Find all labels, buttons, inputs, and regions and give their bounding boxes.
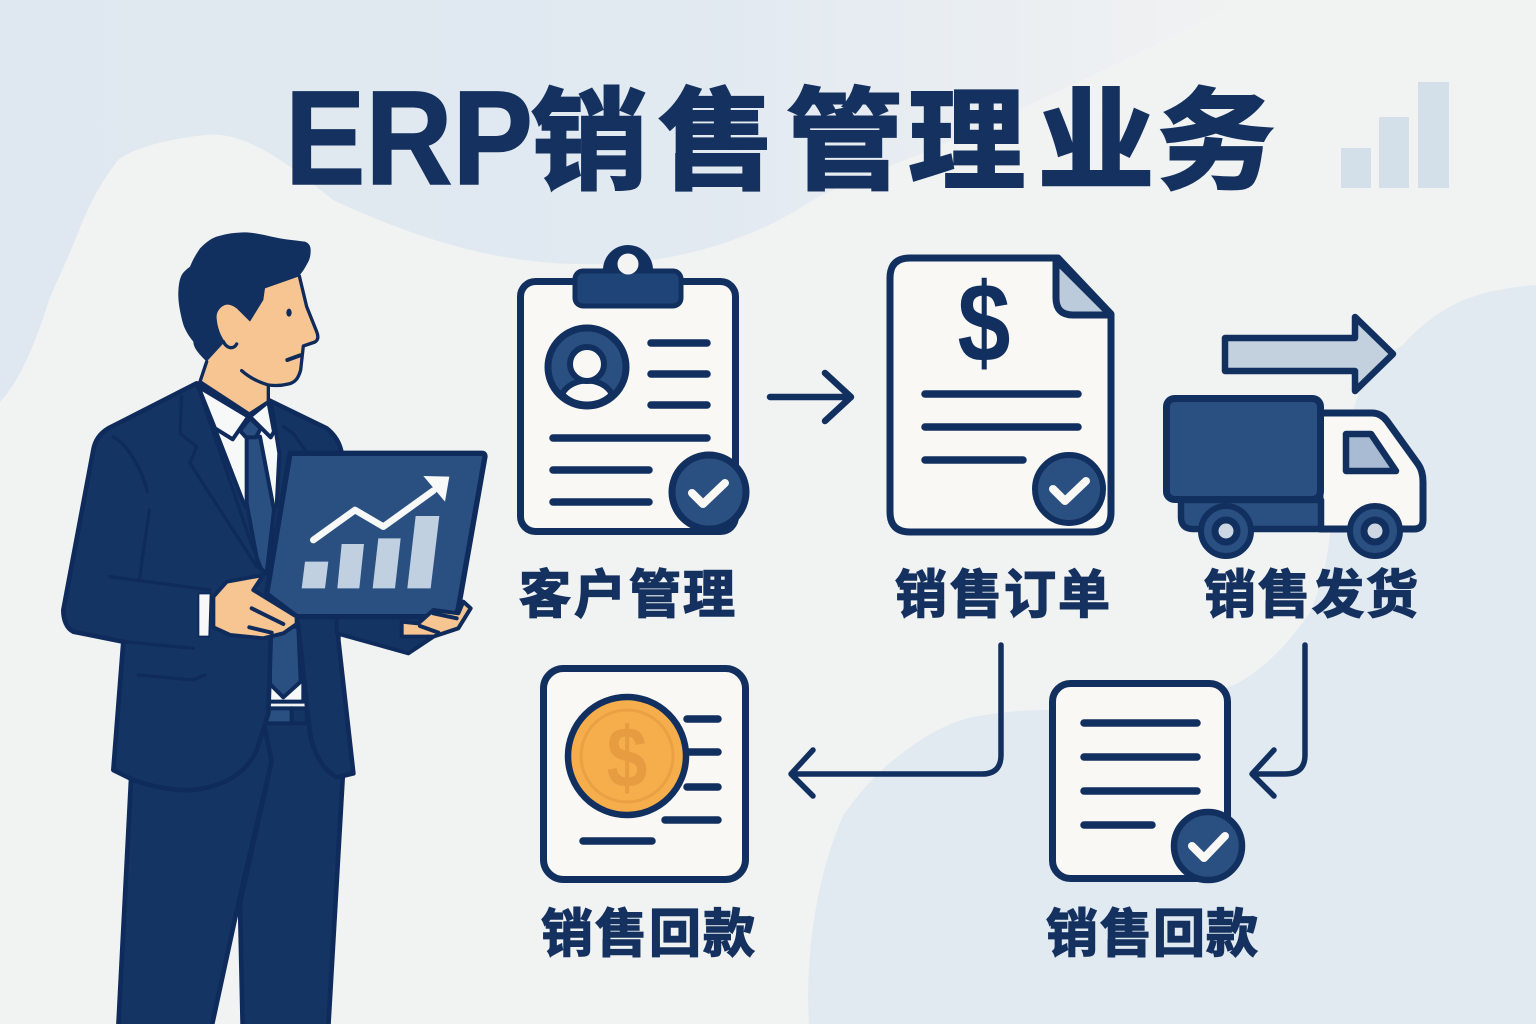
text lines [1084,723,1197,825]
window [1346,434,1396,471]
arrow: customer to order [770,373,851,421]
icon: receipt document [1052,684,1242,880]
left hand [213,575,297,638]
label: customer management: 客户管理 [519,567,735,625]
dollar sign: $ [958,261,1010,386]
label: sales payment left: 销售回款 [541,906,755,964]
check badge [672,455,746,529]
arrow: order to payment [791,645,1001,796]
label: sales order: 销售订单 [895,567,1110,625]
page fold [1056,260,1111,315]
face outline and details [200,276,318,414]
front wheel [1201,506,1251,556]
arrow: delivery to receipt [1252,645,1305,796]
laptop [267,453,485,617]
icon: delivery truck [1166,398,1423,556]
text lines [925,394,1078,460]
clip [575,245,681,306]
text lines [583,719,718,841]
label: sales delivery: 销售发货 [1204,567,1418,625]
arrow: delivery direction [1225,317,1393,391]
head [200,275,318,414]
rear wheel [1350,506,1400,556]
laptop bars [302,516,439,588]
laptop trend arrow [313,476,449,540]
cargo box [1166,398,1320,500]
jacket [63,383,273,790]
coin: $ [607,709,647,805]
title [285,64,1274,213]
shirt and lower tie [265,627,307,723]
coin [568,697,686,815]
title: 销售管理业务 [531,81,1274,204]
icon: sales order document [890,258,1111,532]
title: ERP [285,64,533,213]
icon: faint bar chart [1341,82,1449,188]
cab [1320,413,1423,529]
avatar [548,328,626,406]
chassis [1181,500,1321,529]
left cuff [198,593,211,637]
shirt [198,387,279,507]
tie [240,418,274,573]
trousers [118,720,343,1024]
hair [178,232,311,362]
businessman with laptop [63,232,485,1024]
right jacket panel [268,400,353,777]
icon: payment document with coin [544,668,746,880]
jacket seams [110,383,305,680]
text lines [553,343,707,502]
check badge [1035,455,1103,523]
right hand [402,602,471,637]
label: sales payment right: 销售回款 [1046,906,1258,964]
right sleeve [337,613,433,653]
check badge [1174,812,1242,880]
icon: customer clipboard [520,245,746,532]
collar [198,387,274,439]
